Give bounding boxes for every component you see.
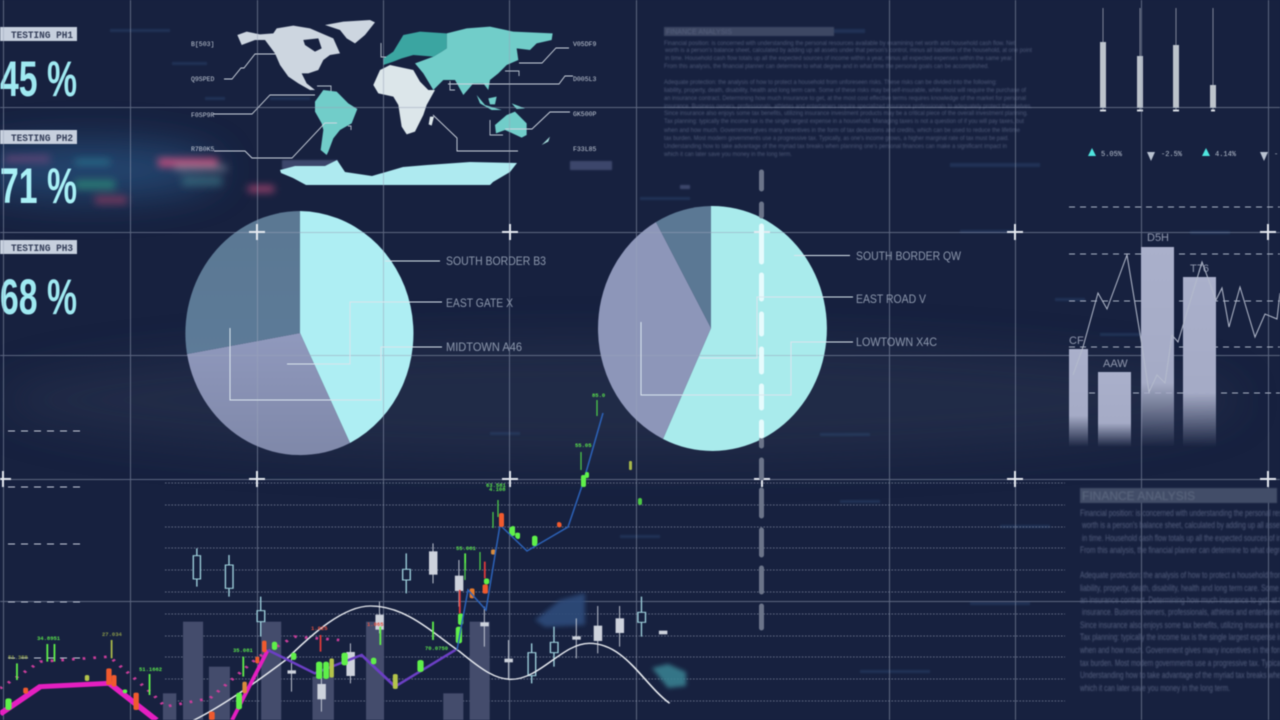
- stat: testing ph3: TESTING PH3: [11, 243, 73, 255]
- Indochina and Sumatra: [477, 95, 502, 110]
- stat: testing ph2: 71 %: [0, 158, 77, 214]
- panel: top article text: insurance. Business owners, professionals, athletes and entertainers require specialized insurance professionals to adequately protect themselves.: [664, 103, 1032, 110]
- stat: testing ph1: TESTING PH1: [11, 30, 73, 42]
- map labels: F33L85: [573, 146, 597, 153]
- panel: top article text: [663, 27, 1032, 158]
- stat: testing ph2: TESTING PH2: [11, 133, 73, 145]
- North America: [237, 26, 340, 90]
- green price labels: 1.025: [311, 625, 328, 632]
- candle stems: [17, 553, 485, 695]
- stat: testing ph1: 45 %: [0, 51, 77, 107]
- upper candles: [465, 400, 642, 580]
- panel: top article text: which it can later save you money in the long term.: [663, 151, 792, 158]
- Madagascar: [429, 117, 434, 126]
- map labels: [191, 41, 597, 153]
- panel: top article text: Tax planning: typically the income tax is the single largest expense in a household. Managing taxes is not a question of if you will pay taxes, but: [664, 118, 1024, 125]
- Europe: [383, 32, 447, 65]
- New Guinea: [512, 103, 525, 109]
- panel: top article text: worth is a person's balance sheet, calculated by adding up all assets under that person's control, minus all liabilities of the household, at one point: [664, 47, 1032, 54]
- pie left labels: SOUTH BORDER B3: [446, 254, 546, 268]
- chart: top right candle bars: [1100, 8, 1216, 110]
- map labels: V05DF9: [573, 41, 597, 48]
- Asia: [415, 27, 553, 95]
- bars: [1069, 247, 1216, 447]
- bar labels: D5H: [1147, 232, 1169, 244]
- green price labels: 85.0: [592, 392, 605, 399]
- Africa: [373, 65, 435, 134]
- green price labels: 55.081: [456, 545, 477, 552]
- pie right labels: [856, 249, 962, 349]
- Antarctica: [280, 160, 517, 185]
- pie left labels: EAST GATE X: [446, 296, 513, 310]
- green price labels: 4.108: [489, 486, 506, 493]
- New Zealand: [542, 137, 550, 145]
- panel: top article text: Adequate protection: the analysis of how to protect a household from unforeseen risks. These risks can be divided into the following:: [664, 79, 997, 86]
- red candles: [23, 520, 562, 720]
- panel: testing phase stats: [0, 27, 77, 325]
- green price labels: 70.0750: [425, 645, 448, 652]
- green price labels: 63.581: [486, 482, 507, 489]
- white curve: [187, 606, 670, 720]
- bar labels: [1069, 232, 1209, 370]
- outline candles: [193, 548, 645, 683]
- Australia: [495, 112, 527, 138]
- purple line: [268, 650, 455, 687]
- panel: top article text: liability, property, death, disability, health and long term care. Some of these risks may be self-insurable, while most will require the purchase of: [664, 87, 1026, 94]
- pie right labels: SOUTH BORDER QW: [856, 249, 962, 263]
- indicators: percent change row: -: [1274, 151, 1278, 159]
- green price labels: 55.05: [575, 442, 592, 449]
- Greenland: [325, 20, 375, 43]
- glitch grey blocks: [282, 160, 690, 189]
- green price labels: 35.081: [233, 647, 254, 654]
- indicators: percent change row: 5.05%: [1101, 151, 1123, 159]
- blurred blue smudges: [535, 593, 686, 688]
- dotted chart gridlines: [165, 483, 1065, 701]
- pie right callouts: [641, 256, 853, 395]
- blue rising line: [457, 413, 603, 650]
- panel: world map: [191, 20, 597, 185]
- map labels: R7B0K5: [191, 146, 215, 153]
- stat: testing ph1: [0, 27, 77, 107]
- indicators: percent change row: 4.14%: [1215, 151, 1237, 159]
- panel: bottom article text: [1079, 488, 1280, 694]
- panel: top article text: From this analysis, the financial planner can determine to what degree and in what time the personal goals can be accomplished.: [664, 63, 989, 70]
- map labels: Q9SPED: [191, 76, 215, 83]
- panel: top article text: Since insurance also enjoys some tax benefits, utilizing insurance investment products may be a critical piece of the overall investment planning.: [664, 110, 1028, 117]
- left dashed markers: [8, 431, 84, 658]
- indicators: percent change row: -2.5%: [1161, 151, 1183, 159]
- bar labels: CF: [1069, 335, 1084, 347]
- pink dotted line: [0, 637, 339, 707]
- stat: testing ph3: [0, 240, 77, 325]
- glitch colour streaks: [5, 155, 274, 204]
- pie right labels: EAST ROAD V: [856, 292, 926, 306]
- green price labels: [8, 392, 605, 673]
- map labels: F0SP9R: [191, 112, 215, 119]
- stat: testing ph3: 68 %: [0, 269, 77, 325]
- panel: top article text: when and how much. Government gives many incentives in the form of tax deductions and credits, which can be used to reduce the lifetime: [663, 127, 1020, 134]
- pie chart: right: [598, 206, 827, 451]
- map region brackets: [317, 43, 519, 135]
- Borneo: [488, 97, 497, 104]
- eurasia group: [373, 27, 553, 145]
- map labels: D005L3: [573, 76, 597, 83]
- map callout lines: [213, 48, 573, 158]
- map labels: GK500P: [573, 111, 597, 118]
- pie left labels: MIDTOWN A46: [446, 340, 522, 354]
- panel: top article text: tax burden. Most modern governments use a progressive tax. Typically, as one's income grows, a higher marginal rate of tax must be paid.: [664, 135, 1009, 142]
- green price labels: 1.065: [367, 621, 384, 628]
- panel: top article text: in time. Household cash flow totals up all the expected sources of income within a year, minus all expected expenses within the same year.: [665, 55, 1013, 62]
- magenta line: [0, 683, 156, 720]
- faint background data readouts: [110, 29, 1230, 673]
- trend line: [1073, 255, 1280, 392]
- indicators: percent change row: [1088, 148, 1278, 161]
- pie right labels: LOWTOWN X4C: [856, 335, 937, 349]
- filled candles: [288, 543, 667, 712]
- pie left callouts: [230, 261, 442, 400]
- chart: lower stock chart: [0, 392, 670, 720]
- green price labels: 34.8951: [37, 635, 61, 642]
- map labels: B[503]: [191, 41, 214, 48]
- South America: [315, 90, 357, 155]
- panel: top article text: Financial position: is concerned with understanding the personal resources available by examining net worth and household cash flow. Net: [664, 40, 1015, 47]
- chart: right bar and line: [1069, 207, 1280, 447]
- pie left labels: [446, 254, 546, 354]
- grid crosses: [0, 224, 1276, 487]
- bar labels: AAW: [1103, 358, 1128, 370]
- panel: top article text: an insurance contract. Determining how much insurance to get, at the most cost effective terms requires knowledge of the market for personal: [664, 95, 1026, 102]
- pie chart: left: [185, 211, 413, 455]
- green candles: [5, 527, 537, 710]
- stat: testing ph2: [0, 130, 77, 214]
- bar labels: T76: [1190, 263, 1209, 275]
- green price labels: 51.359: [8, 654, 28, 661]
- panel: bottom article text: FINANCE ANALYSIS: [1082, 489, 1195, 503]
- vertical dashed glowing scale: [759, 172, 764, 628]
- green price labels: 27.034: [102, 631, 123, 638]
- green price labels: 51.1662: [139, 666, 162, 673]
- volume bars: [163, 622, 490, 720]
- panel: top article text: Understanding how to take advantage of the myriad tax breaks when planning one's personal finances can make a significant impact in: [664, 143, 1007, 150]
- panel: top article text: FINANCE ANALYSIS: [666, 29, 732, 36]
- americas group: [237, 20, 375, 155]
